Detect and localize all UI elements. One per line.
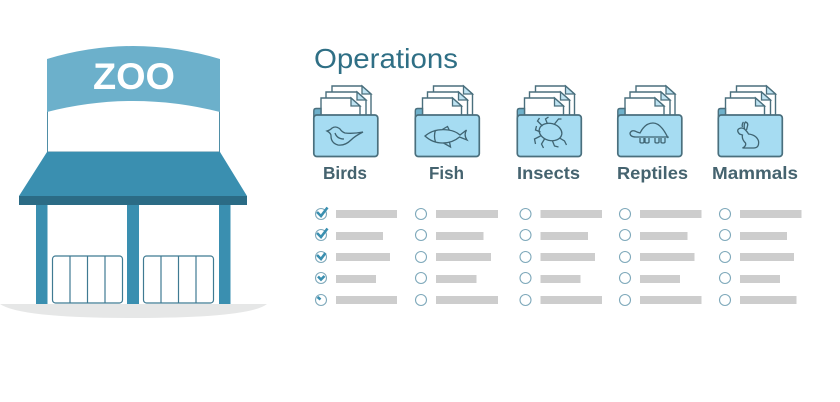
checklist: insects	[520, 208, 602, 306]
ground shadow	[0, 304, 267, 318]
checklist: fish	[416, 208, 498, 306]
checklist: mammals	[720, 208, 802, 306]
sign text: ZOO	[93, 56, 175, 97]
icon: insect	[534, 117, 566, 148]
checklist: birds	[316, 208, 397, 306]
icon: turtle	[630, 123, 668, 143]
check marks	[317, 208, 328, 300]
checklist: reptiles	[620, 208, 702, 306]
icon: fish	[425, 126, 467, 147]
title: Operations	[314, 43, 458, 74]
label: mammals: Mammals	[712, 163, 798, 183]
folder: insects	[517, 86, 581, 156]
folder: birds	[314, 86, 378, 156]
folder: fish	[415, 86, 479, 156]
icon: rabbit	[738, 122, 759, 148]
label: fish: Fish	[429, 163, 464, 183]
awning edge	[19, 196, 247, 205]
illustration: zoo entrance	[0, 46, 267, 318]
sign backing	[48, 100, 220, 152]
folder: mammals	[718, 86, 782, 156]
label: reptiles: Reptiles	[617, 163, 688, 183]
label: insects: Insects	[517, 163, 580, 183]
sign banner	[47, 46, 220, 112]
right gate	[144, 256, 214, 303]
left gate	[52, 256, 122, 303]
icon: bird	[327, 127, 363, 145]
pillars	[36, 205, 230, 304]
folder: reptiles	[618, 86, 682, 156]
awning	[19, 152, 247, 196]
label: birds: Birds	[323, 163, 367, 183]
